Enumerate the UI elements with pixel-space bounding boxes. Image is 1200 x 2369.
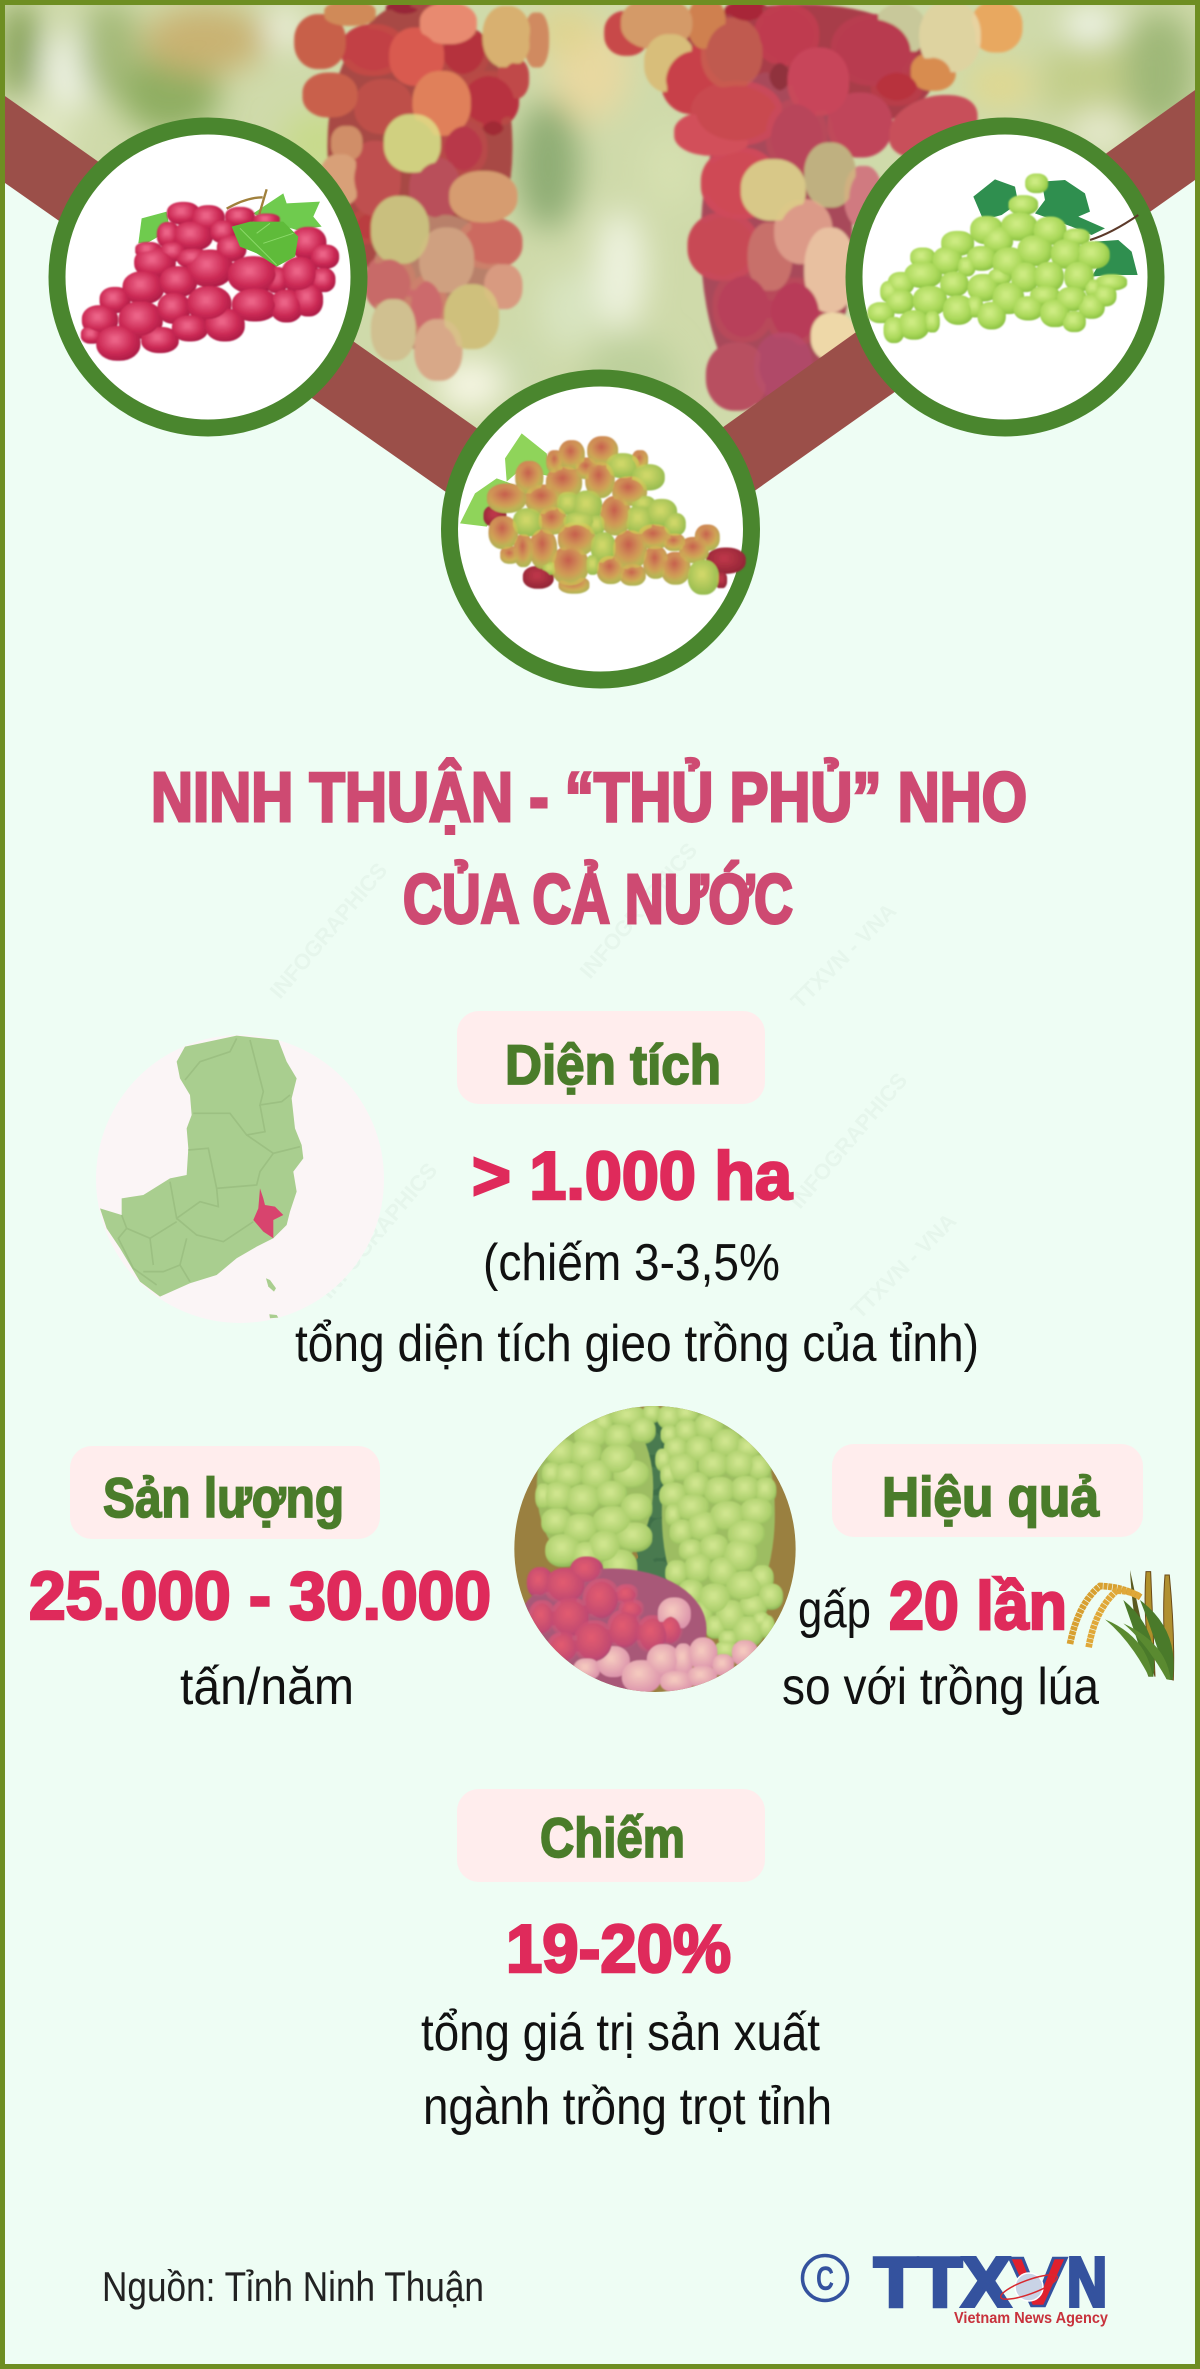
faint watermarks: INFOGRAPHICS — [315, 1158, 442, 1303]
section: area — [295, 1011, 979, 1373]
map of southern Vietnam with Ninh Thuan highlighted — [96, 1035, 384, 1323]
V-shaped brown band — [5, 90, 1195, 600]
bunch left — [297, 3, 547, 378]
section: area: Diện tích — [505, 1033, 721, 1096]
faint watermarks: INFOGRAPHICS — [575, 838, 702, 983]
title: CỦA CẢ NƯỚC — [403, 859, 793, 938]
section: area: (chiếm 3-3,5% — [483, 1234, 780, 1292]
section: share: 19-20% — [506, 1911, 731, 1987]
section: efficiency: gấp — [798, 1581, 871, 1639]
section: efficiency — [782, 1444, 1143, 1716]
section: output: Sản lượng — [103, 1466, 344, 1529]
section: efficiency: 20 lần — [889, 1568, 1067, 1644]
logo: copyright and TTXVN — [802, 2243, 1108, 2327]
section: share — [421, 1789, 832, 2136]
circle: red grapes — [57, 126, 359, 428]
source: Nguồn: Tỉnh Ninh Thuận — [102, 2263, 484, 2310]
hero photo: grape bunches hanging on the vine — [5, 5, 1195, 428]
icon: rice plant — [1070, 1570, 1174, 1680]
title: NINH THUẬN - “THỦ PHỦ” NHO — [151, 757, 1027, 836]
faint watermarks: TTXVN - VNA — [786, 898, 901, 1014]
circle: mixed red-green grapes — [450, 378, 752, 680]
title — [151, 757, 1027, 938]
logo: copyright and TTXVN: Vietnam News Agency — [954, 2310, 1108, 2327]
section: efficiency: so với trồng lúa — [782, 1658, 1099, 1716]
faint watermarks: INFOGRAPHICS — [785, 1068, 912, 1213]
faint watermarks — [265, 838, 961, 1324]
faint watermarks: INFOGRAPHICS — [265, 858, 392, 1003]
faint watermarks: TTXVN - VNA — [846, 1208, 961, 1324]
logo: copyright and TTXVN: C — [816, 2260, 834, 2298]
photo: box of green and red grapes — [512, 1400, 798, 1693]
section: output — [29, 1446, 491, 1716]
circle: green grapes — [854, 126, 1156, 428]
section: output: 25.000 - 30.000 — [29, 1558, 491, 1634]
bunch right — [607, 0, 1020, 408]
section: share: tổng giá trị sản xuất — [421, 2004, 820, 2062]
section: area: > 1.000 ha — [472, 1138, 793, 1214]
section: area: tổng diện tích gieo trồng của tỉnh) — [295, 1315, 979, 1373]
section: efficiency: Hiệu quả — [882, 1465, 1100, 1528]
logo: copyright and TTXVN: N — [1067, 2243, 1107, 2321]
section: share: Chiếm — [540, 1806, 685, 1869]
section: share: ngành trồng trọt tỉnh — [423, 2078, 832, 2136]
logo: copyright and TTXVN: TTX — [874, 2243, 1010, 2321]
section: output: tấn/năm — [180, 1658, 354, 1716]
logo: copyright and TTXVN: V — [1009, 2243, 1067, 2321]
